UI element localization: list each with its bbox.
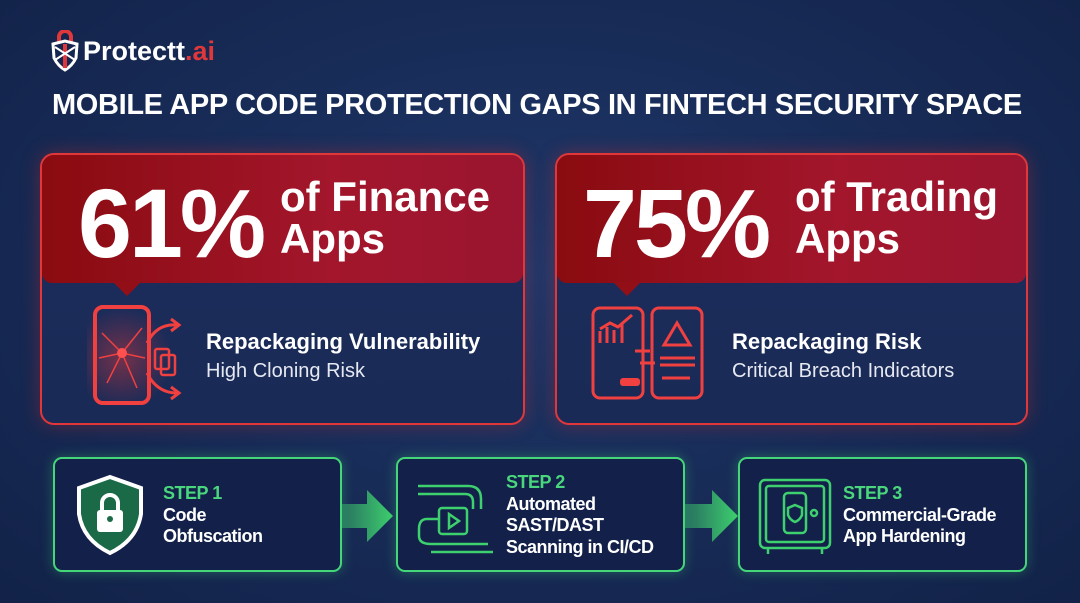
header: 61%	[42, 155, 523, 283]
text: repackaging vulnerability: Repackaging Vulnerability	[206, 329, 480, 354]
step 3: STEP 3	[843, 483, 902, 503]
panel: finance: High Cloning Risk	[206, 360, 365, 382]
header: 75%	[557, 155, 1026, 283]
step 3	[738, 457, 1027, 572]
step 1	[53, 457, 342, 572]
step 2: STEP 2	[506, 472, 565, 492]
arrow 2	[685, 490, 738, 542]
panel: trading	[555, 153, 1028, 425]
icon: pipeline chip	[418, 484, 493, 554]
header: 61%: Apps	[280, 215, 385, 262]
header: 61%: 61%	[78, 169, 263, 278]
panel: trading: Critical Breach Indicators	[732, 360, 954, 382]
step 3: Commercial-Grade	[843, 504, 996, 524]
step 1: Obfuscation	[163, 526, 263, 546]
step 2: Automated	[506, 494, 596, 514]
step 3: App Hardening	[843, 526, 966, 546]
header: 61%: of Finance	[280, 173, 490, 220]
step 1: Code	[163, 504, 206, 524]
icon: safe with phone	[758, 478, 832, 554]
header: 75%: of Trading	[795, 173, 998, 220]
logo: Protectt.ai	[83, 36, 215, 66]
step 2: SAST/DAST	[506, 515, 604, 535]
title: MOBILE APP CODE PROTECTION GAPS IN FINTECH SECURITY SPACE	[52, 89, 1022, 121]
step 2	[396, 457, 685, 572]
text: repackaging risk: Repackaging Risk	[732, 329, 922, 354]
header: 75%: Apps	[795, 215, 900, 262]
icon: two phones	[592, 306, 704, 400]
step 2: Scanning in CI/CD	[506, 536, 654, 556]
logo	[51, 30, 215, 72]
icon: shield lock	[77, 474, 143, 556]
arrow 1	[342, 490, 393, 542]
panel: finance	[40, 153, 525, 425]
header: 75%: 75%	[583, 169, 768, 278]
icon: cracked phone	[87, 305, 182, 405]
step 1: STEP 1	[163, 483, 222, 503]
